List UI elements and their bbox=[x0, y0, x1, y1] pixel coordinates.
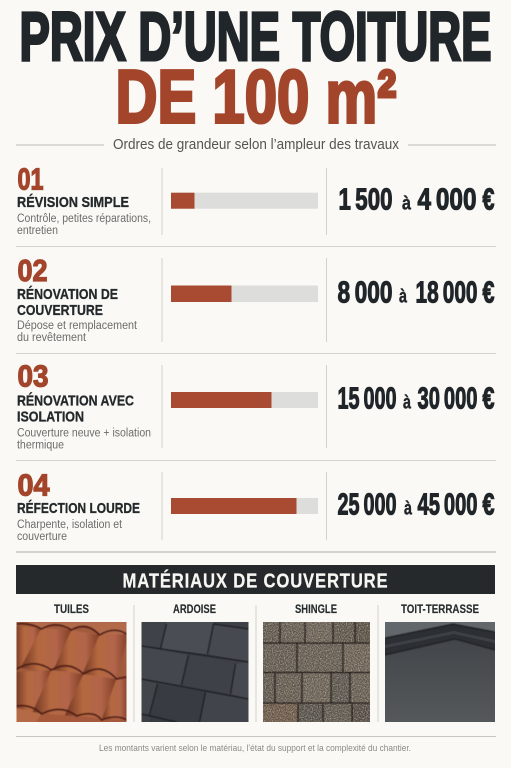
price: 25 000 bbox=[338, 486, 396, 522]
heading: rénovation de couverture: RÉNOVATION DE bbox=[17, 286, 118, 303]
description: entretien bbox=[17, 225, 58, 237]
number 04: 04 bbox=[18, 468, 50, 502]
description: Contrôle, petites réparations, bbox=[17, 213, 151, 225]
number 03: 03 bbox=[18, 358, 48, 394]
price: € bbox=[482, 182, 494, 216]
panel: row 01 bbox=[17, 162, 494, 237]
number 01: 01 bbox=[18, 162, 44, 196]
bar bbox=[171, 392, 318, 408]
subtitle: Ordres de grandeur selon l’ampleur des travaux bbox=[113, 136, 399, 153]
image: shingle bbox=[263, 622, 370, 722]
description: couverture bbox=[17, 531, 67, 543]
price: 30 000 bbox=[418, 380, 478, 416]
heading: rénovation avec isolation bbox=[17, 392, 134, 426]
price: 18 000 bbox=[416, 274, 478, 310]
materials banner bbox=[16, 565, 495, 594]
price bbox=[338, 182, 494, 216]
price: 8 000 bbox=[338, 274, 392, 310]
material: shingle: SHINGLE bbox=[295, 602, 337, 616]
description: Couverture neuve + isolation bbox=[17, 428, 151, 440]
title line 2: DE 100 m² bbox=[116, 54, 396, 138]
price: € bbox=[482, 380, 494, 416]
bar bbox=[171, 498, 318, 514]
price: à bbox=[399, 286, 407, 308]
description bbox=[17, 320, 138, 344]
price bbox=[338, 486, 494, 522]
number 02: 02 bbox=[18, 253, 48, 288]
price: à bbox=[403, 392, 411, 414]
panel: row 02 bbox=[17, 253, 494, 344]
bar bbox=[171, 193, 318, 209]
panel: row 04 bbox=[17, 468, 494, 543]
description bbox=[17, 213, 151, 237]
heading: rénovation de couverture: COUVERTURE bbox=[17, 303, 103, 319]
price: 1 500 bbox=[338, 182, 392, 216]
image: tuiles bbox=[14, 622, 128, 724]
materials banner: MATÉRIAUX DE COUVERTURE bbox=[122, 570, 388, 592]
price bbox=[338, 380, 494, 416]
image: ardoise bbox=[142, 622, 248, 722]
material: ardoise: ARDOISE bbox=[173, 602, 216, 616]
price: à bbox=[402, 194, 411, 214]
description: thermique bbox=[17, 440, 64, 452]
image: toit-terrasse bbox=[385, 622, 495, 722]
material: tuiles: TUILES bbox=[54, 602, 89, 616]
material: shingle bbox=[263, 602, 370, 722]
heading: rénovation de couverture bbox=[17, 286, 118, 319]
price: à bbox=[404, 498, 412, 520]
price: 4 000 bbox=[418, 182, 476, 216]
title bbox=[20, 0, 492, 138]
price: 45 000 bbox=[418, 486, 478, 522]
heading: révision simple: RÉVISION SIMPLE bbox=[17, 194, 129, 211]
price: € bbox=[482, 274, 494, 310]
heading: rénovation avec isolation: RÉNOVATION AVEC bbox=[17, 392, 134, 410]
heading: réfection lourde: RÉFECTION LOURDE bbox=[17, 500, 140, 517]
panel: row 03 bbox=[17, 358, 494, 452]
material: ardoise bbox=[142, 602, 248, 722]
material: tuiles bbox=[14, 602, 128, 724]
material: toit-terrasse: TOIT-TERRASSE bbox=[401, 602, 479, 616]
material: toit-terrasse bbox=[385, 602, 495, 722]
description bbox=[17, 519, 123, 543]
footnote: Les montants varient selon le matériau, l’état du support et la complexité du chantier. bbox=[99, 743, 411, 754]
bar bbox=[171, 286, 318, 302]
description: du revêtement bbox=[17, 332, 87, 344]
description: Charpente, isolation et bbox=[17, 519, 123, 531]
description: Dépose et remplacement bbox=[17, 320, 138, 332]
price bbox=[338, 274, 494, 310]
heading: rénovation avec isolation: ISOLATION bbox=[17, 410, 84, 426]
description bbox=[17, 428, 151, 452]
price: € bbox=[482, 486, 494, 522]
price: 15 000 bbox=[338, 380, 396, 416]
